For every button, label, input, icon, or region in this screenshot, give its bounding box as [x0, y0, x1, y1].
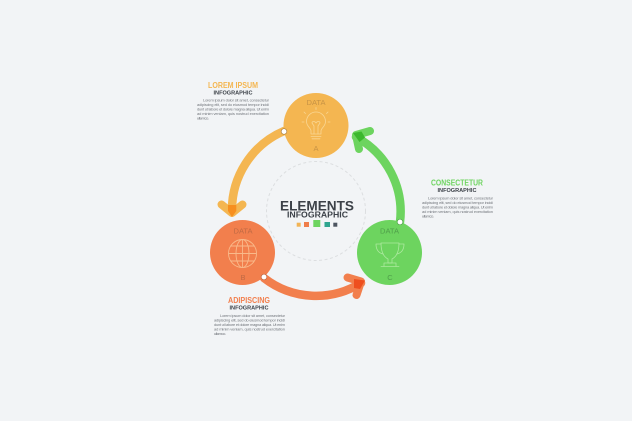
- arrow: B to C: [264, 278, 365, 296]
- text block: Consectetur: adipiscing elit, sed do eiusmod tempor incidi: [422, 200, 493, 205]
- text block: Lorem Ipsum: adipiscing elit, sed do eiusmod tempor incidi: [197, 102, 269, 107]
- circle C: [357, 220, 422, 285]
- icon: trophy: [376, 243, 404, 266]
- text block: Consectetur: dunt ut labore et dolore magna aliqua. Ut enim: [422, 204, 494, 210]
- circle C: C: [387, 273, 393, 282]
- circle A: A: [313, 144, 319, 153]
- text block: Adipiscing: adipiscing elit, sed do eiusmod tempor incidi: [214, 318, 285, 322]
- text block: Consectetur: [422, 178, 494, 218]
- text block: Consectetur: Lorem ipsum dolor sit amet, consectetur: [428, 196, 494, 200]
- circle A: [284, 93, 348, 158]
- center title: INFOGRAPHIC: [287, 211, 348, 220]
- text block: Adipiscing: ullamco.: [214, 331, 226, 336]
- circle C: DATA: [380, 226, 399, 236]
- text block: Adipiscing: ADIPISCING: [228, 296, 270, 305]
- circle B: [210, 220, 275, 285]
- icon: globe: [228, 240, 256, 268]
- text block: Adipiscing: Lorem ipsum dolor sit amet, consectetur: [220, 313, 286, 318]
- text block: Lorem Ipsum: Lorem ipsum dolor sit amet, consectetur: [203, 98, 270, 102]
- text block: Adipiscing: INFOGRAPHIC: [230, 306, 269, 312]
- circle B: B: [240, 273, 246, 282]
- connector dots: [261, 129, 403, 280]
- text block: Adipiscing: ad minim veniam, quis nostrud exercitation: [214, 326, 285, 332]
- text block: Lorem Ipsum: ad minim veniam, quis nostrud exercitation: [197, 111, 269, 116]
- circle B: DATA: [234, 226, 252, 236]
- text block: Lorem Ipsum: LOREM IPSUM: [208, 81, 258, 90]
- center title: ELEMENTS: [280, 198, 354, 214]
- arrow: A to B: [222, 131, 284, 217]
- color legend squares: [297, 220, 337, 227]
- text block: Lorem Ipsum: ullamco.: [197, 116, 209, 120]
- text block: Adipiscing: dunt ut labore et dolore magna aliqua. Ut enim: [214, 322, 286, 327]
- circle A: DATA: [306, 98, 326, 107]
- text block: Consectetur: ad minim veniam, quis nostrud exercitation: [422, 209, 493, 214]
- text block: Lorem Ipsum: INFOGRAPHIC: [214, 90, 253, 96]
- text block: Consectetur: INFOGRAPHIC: [438, 188, 477, 194]
- icon: light bulb: [302, 108, 330, 139]
- dashed center circle: [266, 162, 366, 260]
- arrow: C to A: [353, 131, 401, 222]
- text block: Lorem Ipsum: dunt ut labore et dolore magna aliqua. Ut enim: [197, 106, 270, 112]
- text block: Consectetur: CONSECTETUR: [431, 178, 483, 188]
- text block: Adipiscing: [214, 296, 286, 336]
- text block: Consectetur: ullamco.: [422, 214, 434, 218]
- text block: Lorem Ipsum: [197, 81, 270, 120]
